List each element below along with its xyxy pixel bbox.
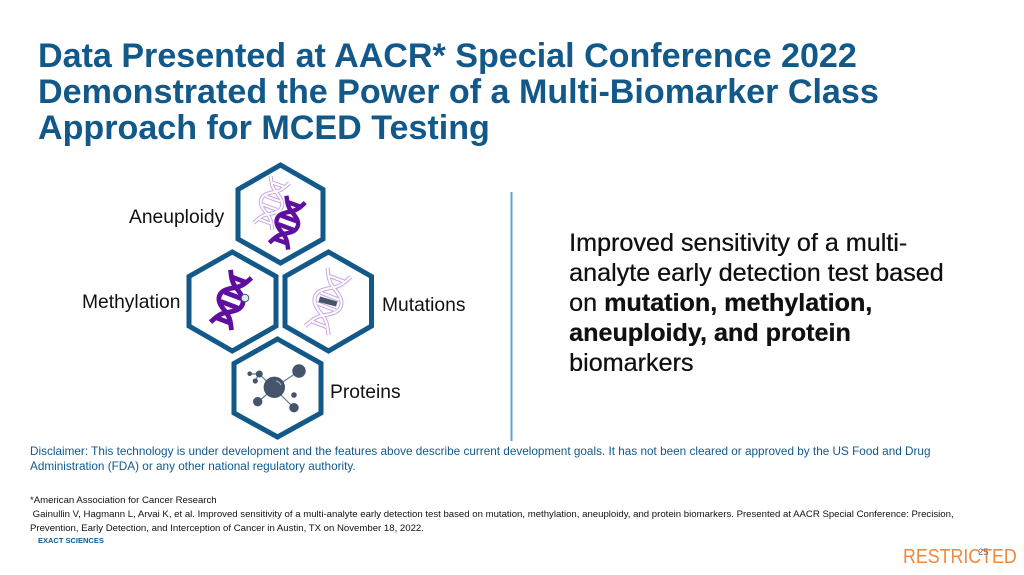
title — [38, 37, 879, 147]
references: *American Association for Cancer Research — [30, 495, 217, 506]
disclaimer: Administration (FDA) or any other national regulatory authority. — [30, 460, 356, 473]
title: Approach for MCED Testing — [38, 109, 490, 147]
icon: light DNA — [253, 176, 290, 230]
vertical divider — [510, 192, 512, 441]
study description text: Improved sensitivity of a multi- — [569, 229, 907, 257]
study description text: on mutation, methylation, — [569, 289, 872, 317]
hexagon: proteins — [234, 339, 321, 437]
disclaimer — [30, 445, 930, 473]
study description text — [569, 229, 944, 377]
title: Demonstrated the Power of a Multi-Biomarker Class — [38, 73, 879, 111]
page number: 25 — [978, 547, 989, 558]
hexagon: mutations — [285, 252, 372, 351]
icon: mutation marker — [318, 296, 338, 306]
hexagon: methylation — [189, 252, 276, 351]
icon: methyl group — [241, 294, 249, 302]
icon: methylated DNA — [209, 269, 253, 331]
icon: dark DNA — [268, 195, 306, 250]
logo: Exact Sciences: EXACT SCIENCES — [38, 536, 104, 545]
title: Data Presented at AACR* Special Conference 2022 — [38, 37, 857, 75]
icon: mutated DNA — [304, 267, 352, 336]
label: Methylation: Methylation — [82, 292, 180, 312]
study description text: analyte early detection test based — [569, 259, 944, 287]
citation: Prevention, Early Detection, and Interception of Cancer in Austin, TX on November 18, 2022. — [30, 523, 424, 534]
study description text: biomarkers — [569, 349, 693, 377]
icon: protein molecules — [247, 364, 306, 412]
citation — [30, 509, 954, 534]
study description text: aneuploidy, and protein — [569, 319, 851, 347]
disclaimer: Disclaimer: This technology is under development and the features above describe current development goals. It has not been cleared or approved by the US Food and Drug — [30, 445, 930, 458]
citation: Gainullin V, Hagmann L, Arvai K, et al. Improved sensitivity of a multi-analyte early detection test based on mutation, methylation, aneuploidy, and protein biomarkers. Presented at AACR Special Conference: Precision, — [33, 509, 954, 520]
label: Proteins: Proteins — [330, 382, 401, 402]
restricted marking: RESTRICTED — [903, 546, 1017, 568]
label: Aneuploidy: Aneuploidy — [129, 206, 224, 228]
label: Mutations: Mutations — [382, 294, 465, 316]
hexagon: aneuploidy — [238, 165, 323, 263]
